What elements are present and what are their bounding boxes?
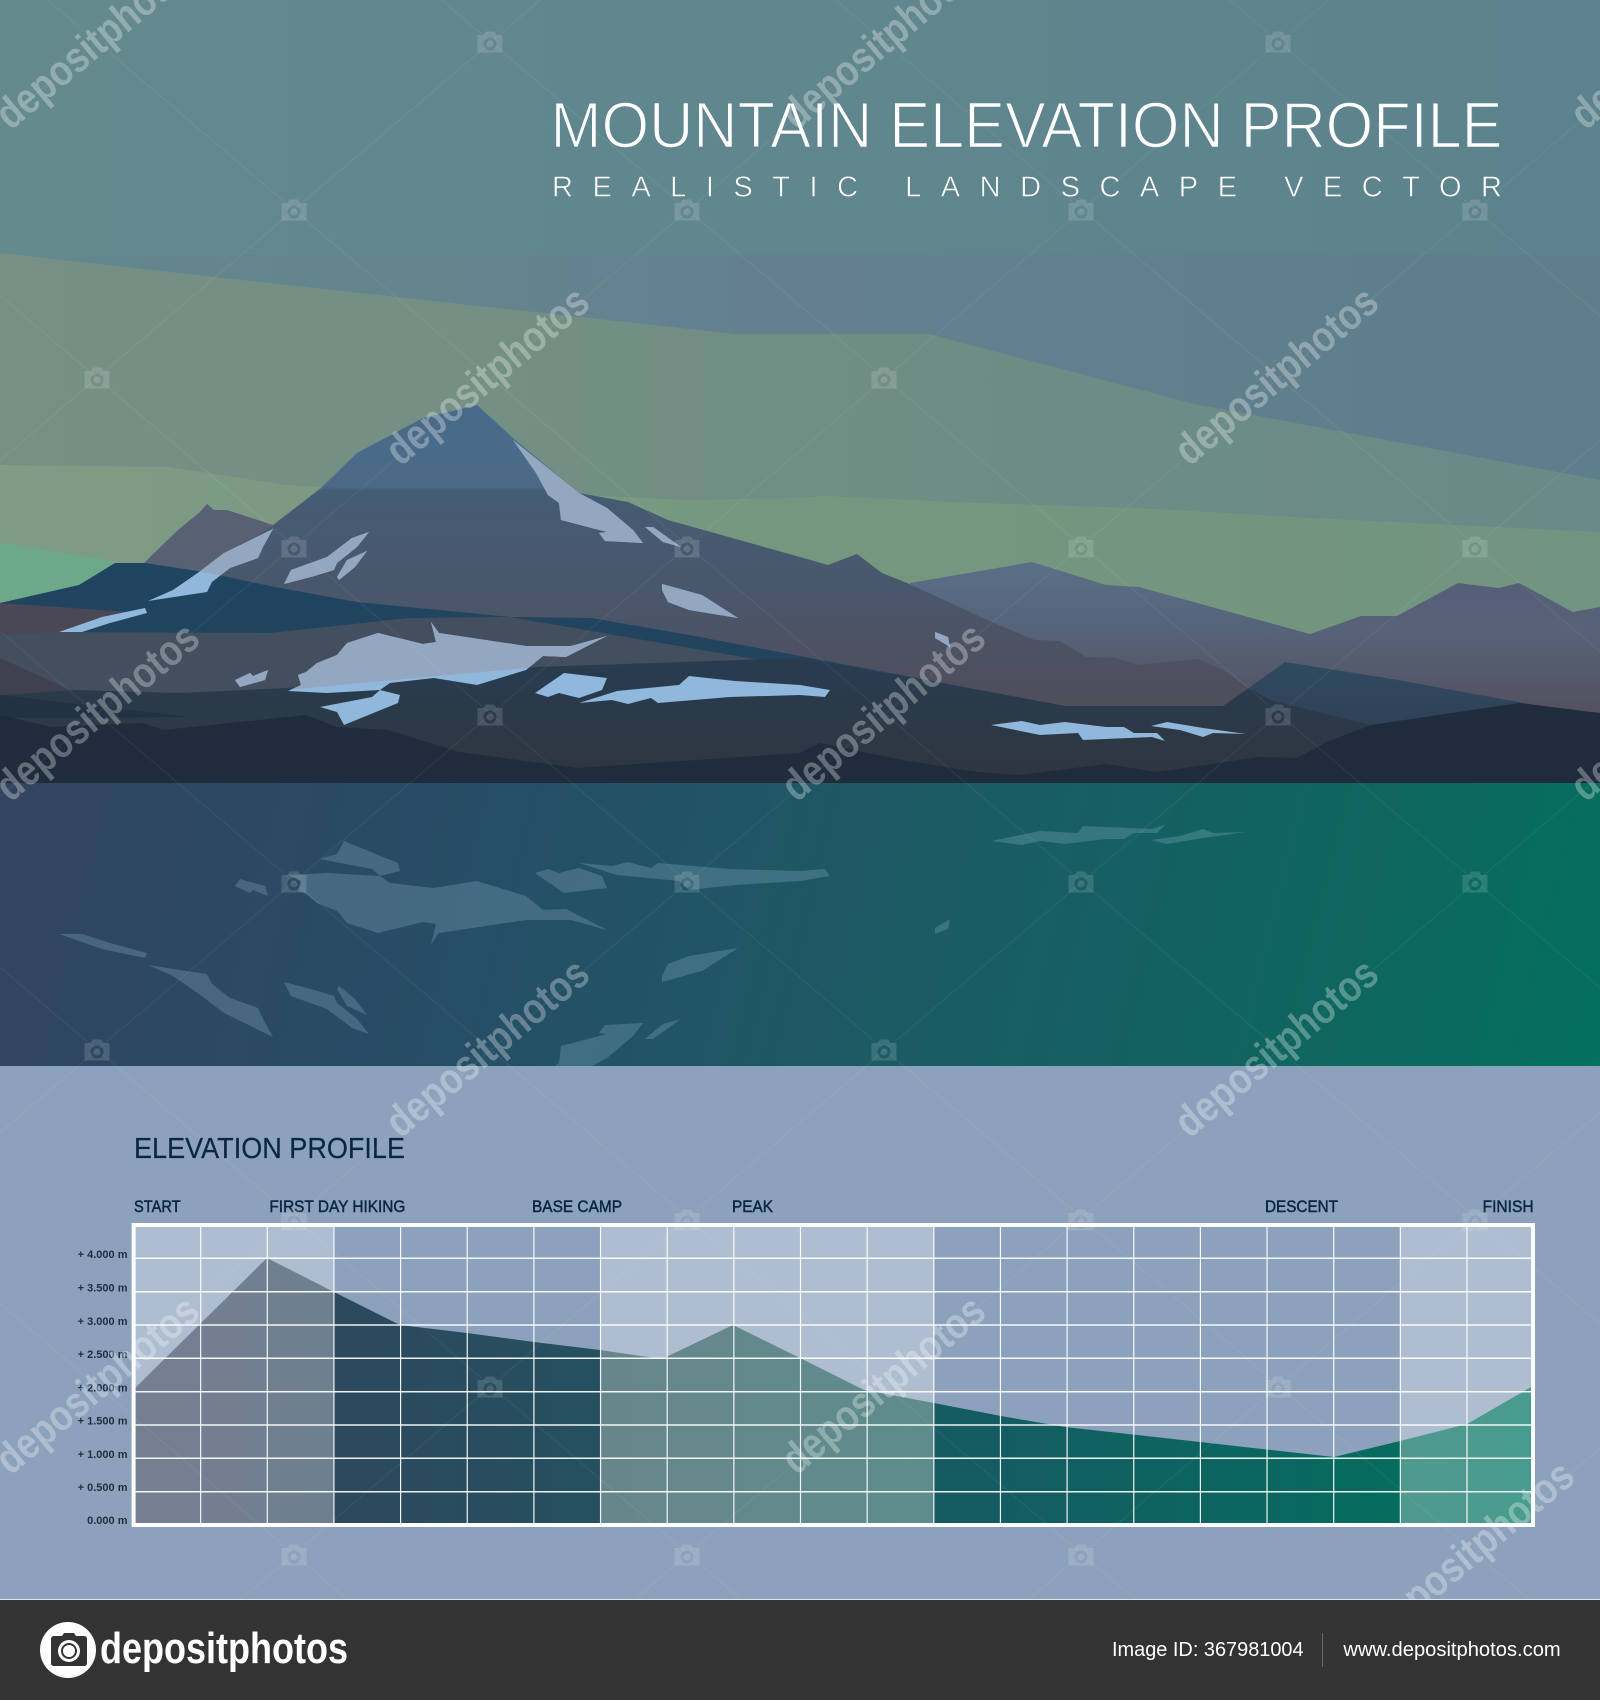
y axis labels: + 2.000 m — [78, 1382, 128, 1394]
far right mountain — [1230, 583, 1600, 725]
panel: mountain range — [0, 405, 1600, 783]
icon: camera logo — [40, 1622, 96, 1678]
footer bar — [0, 1599, 1600, 1700]
stage labels: PEAK — [732, 1197, 774, 1216]
watermark: stock text: depositphotos — [376, 949, 599, 1147]
watermark: stock text: depositphotos — [1165, 949, 1388, 1147]
slate mid ridge — [0, 617, 760, 695]
y axis labels: + 0.500 m — [78, 1482, 128, 1494]
y axis labels — [78, 1249, 128, 1527]
chart: elevation profile — [134, 1225, 1533, 1526]
watermark: stock text: depositphotos — [1165, 277, 1388, 475]
stage labels: BASE CAMP — [532, 1197, 622, 1216]
stage labels: START — [134, 1197, 181, 1216]
watermark: stock text: depositphotos — [376, 277, 599, 475]
watermark: camera icons — [84, 32, 1488, 1566]
title: MOUNTAIN ELEVATION PROFILE — [550, 88, 1502, 162]
dark lower ridge — [0, 658, 1223, 783]
y axis labels: + 3.000 m — [78, 1316, 128, 1328]
logo wordmark: depositphotos — [100, 1624, 348, 1673]
panel: lake — [0, 783, 1600, 1066]
brown left slope — [0, 603, 143, 637]
dark blue front ridge — [0, 563, 1600, 783]
panel: elevation chart background — [0, 1066, 1600, 1600]
grid — [134, 1225, 1533, 1525]
chart frame — [134, 1225, 1533, 1525]
watermark: stock text: depositphotos — [772, 613, 995, 811]
y axis labels: + 3.500 m — [78, 1282, 128, 1294]
y axis labels: + 4.000 m — [78, 1249, 128, 1261]
subtitle: REALISTIC LANDSCAPE VECTOR — [552, 172, 1502, 204]
main peak — [204, 405, 1249, 720]
lighter column bands — [134, 1225, 1533, 1525]
watermark: stock text: depositphotos — [772, 1286, 995, 1484]
elevation area by stage — [136, 1259, 1531, 1523]
right blue ridge — [1249, 662, 1600, 783]
y axis labels: + 2.500 m — [78, 1349, 128, 1361]
stage labels: FINISH — [1483, 1197, 1534, 1216]
panel: sky — [0, 0, 1600, 783]
small left peak — [145, 504, 273, 640]
y axis labels: + 1.000 m — [78, 1449, 128, 1461]
darkest foreground shore — [0, 703, 1600, 783]
y axis labels: 0.000 m — [87, 1515, 128, 1527]
heading: elevation profile: ELEVATION PROFILE — [134, 1133, 405, 1165]
website url: www.depositphotos.com — [1342, 1639, 1561, 1661]
stage labels: DESCENT — [1265, 1197, 1338, 1216]
image id: Image ID: 367981004 — [1112, 1639, 1304, 1661]
back right mountain — [910, 562, 1340, 720]
stage labels: FIRST DAY HIKING — [269, 1197, 405, 1216]
snow reflections — [60, 825, 1245, 1066]
stage labels — [134, 1197, 1534, 1216]
y axis labels: + 1.500 m — [78, 1416, 128, 1428]
snow patches — [59, 440, 1246, 741]
